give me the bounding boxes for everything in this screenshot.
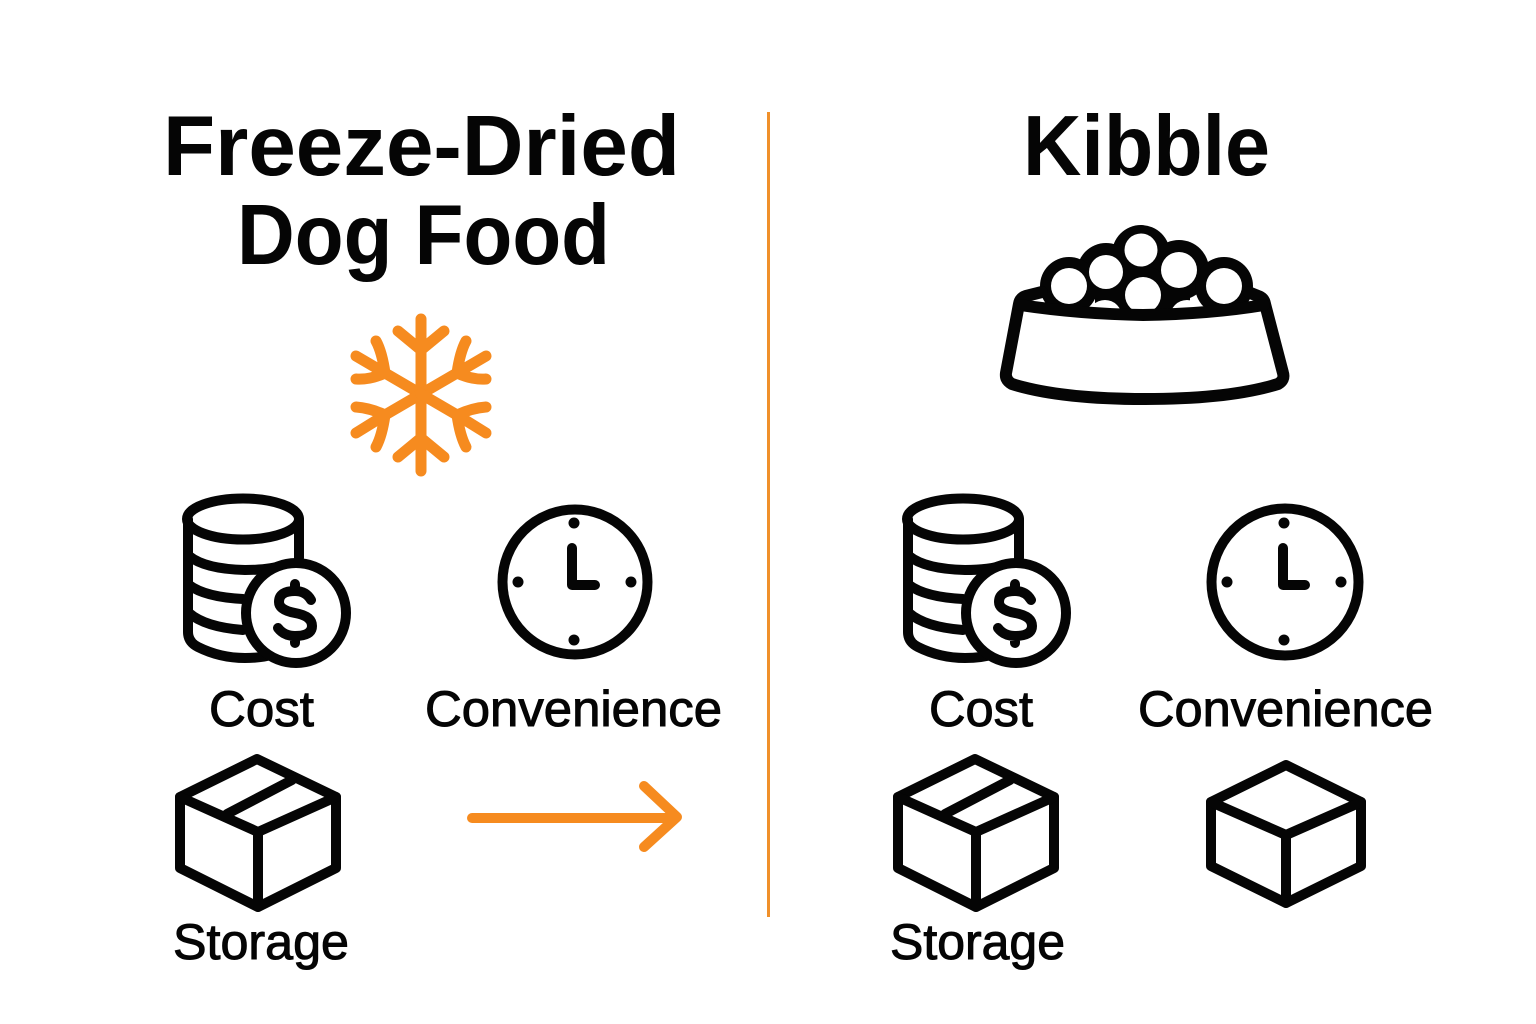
divider: vertical orange line [767,112,770,917]
label: Convenience: Convenience [425,681,722,737]
icon: kibble bowl [1006,225,1283,399]
icon: taped box storage [180,759,336,907]
title: Freeze-Dried Dog Food: Dog Food [237,188,610,283]
label: Convenience: Convenience [1138,681,1433,737]
icon: clock convenience [1212,508,1358,656]
icon: clock convenience [502,510,648,654]
label: Storage: Storage [890,914,1065,970]
icon: coins cost [187,498,346,663]
panel: kibble [890,99,1433,970]
arrow: orange right arrow [472,786,677,847]
label: Cost: Cost [929,681,1033,737]
title: Freeze-Dried Dog Food: Freeze-Dried [163,99,680,194]
icon: taped box storage [898,759,1054,907]
icon: plain cube [1211,765,1361,903]
icon: coins cost [907,498,1066,663]
label: Cost: Cost [209,681,314,737]
panel: freeze-dried dog food [163,99,722,970]
icon: snowflake [356,319,486,471]
title: Kibble: Kibble [1023,99,1270,194]
title: Freeze-Dried Dog Food [163,99,680,283]
label: Storage: Storage [173,914,349,970]
